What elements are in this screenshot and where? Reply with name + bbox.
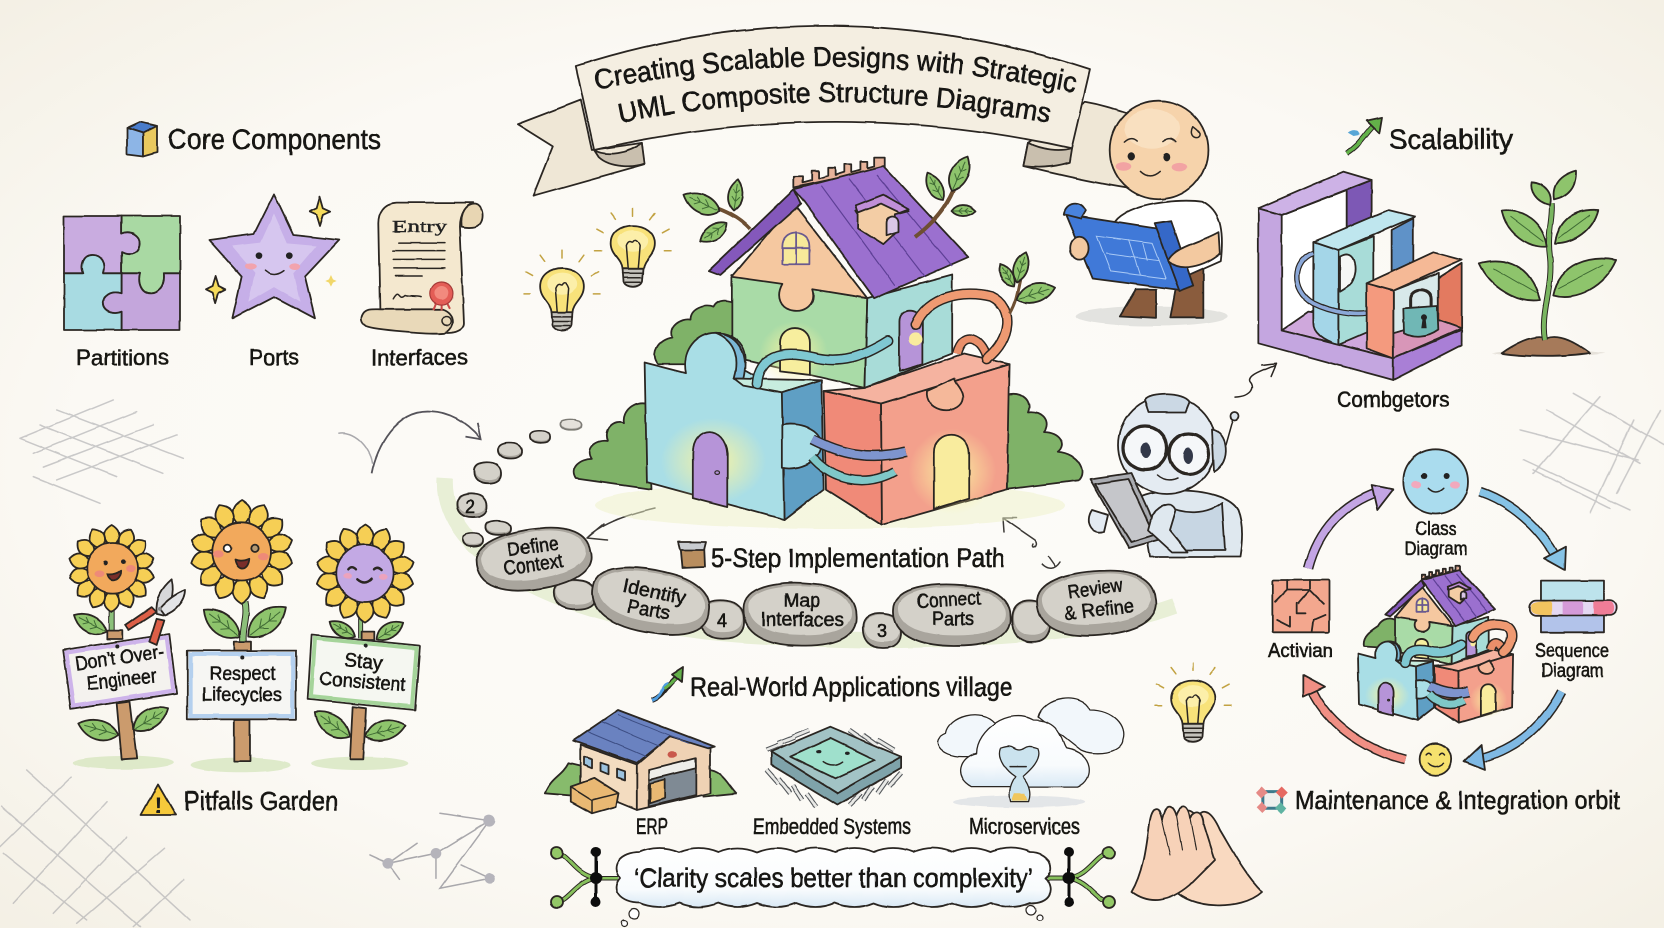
stone number 2: 2	[465, 497, 475, 517]
node: sequence diagram icon	[1529, 581, 1617, 632]
stepping stone path panel	[445, 420, 1175, 648]
stone: define context: Context	[502, 550, 565, 580]
heading: implementation path: 5-Step Implementation Path	[711, 543, 1005, 573]
grass band	[445, 478, 1175, 640]
quote text: ‘Clarity scales better than complexity’	[634, 863, 1033, 893]
icon: collaborating hands	[1132, 806, 1262, 905]
banner ribbon	[517, 26, 1166, 196]
sign text: respect lifecycles: Lifecycles	[202, 684, 282, 706]
ground shadow	[595, 481, 1065, 529]
stone: define context: Define	[506, 533, 560, 562]
icon: village arrow	[652, 667, 683, 700]
label: partitions: Partitions	[76, 345, 169, 370]
sign text: respect lifecycles: Respect	[209, 663, 276, 685]
title text path one	[596, 66, 1072, 92]
icon: orbit heading	[1256, 787, 1288, 814]
arrow: robot to connectors	[1235, 363, 1276, 398]
central composite house	[574, 153, 1082, 529]
icon: ERP warehouse	[545, 710, 736, 813]
heading: maintenance and integration orbit: Maintenance & Integration orbit	[1295, 785, 1621, 815]
small trail stones	[457, 420, 1050, 648]
mini composite house	[1358, 566, 1513, 723]
icon: light bulb upper	[595, 208, 671, 287]
node: smiley	[1420, 743, 1452, 775]
label: embedded systems: Embedded Systems	[753, 814, 911, 839]
icon: path bucket	[678, 542, 706, 568]
heading: real-world applications village: Real-World Applications village	[690, 672, 1013, 702]
icon: ports star	[206, 194, 339, 318]
icon: light bulb lower	[524, 251, 600, 331]
stone: identify parts	[587, 561, 715, 642]
arrow: house to first step	[587, 508, 655, 540]
thought bubbles	[621, 905, 1043, 926]
icon: growth arrow	[1347, 117, 1382, 153]
label: microservices: Microservices	[969, 814, 1080, 839]
stone number 3: 3	[877, 621, 887, 641]
panel: scalability	[1258, 117, 1617, 412]
icon: warning triangle	[141, 784, 176, 818]
heading icon: cube	[127, 122, 157, 156]
stone: map interfaces: Map	[784, 590, 820, 612]
stone: map interfaces	[744, 583, 856, 646]
flower: stay consistent	[308, 524, 420, 759]
icon: pruning shears	[125, 579, 185, 645]
flower: respect lifecycles	[187, 500, 296, 762]
label: class diagram	[1404, 518, 1468, 560]
house building blocks	[645, 157, 1010, 525]
label: ports: Ports	[249, 345, 299, 370]
panel: maintenance and integration orbit	[1256, 449, 1621, 815]
panel: pitfalls garden	[63, 500, 420, 818]
quote callout	[551, 847, 1115, 926]
illustration: nested connector frames	[1258, 172, 1462, 380]
connector: left	[551, 847, 618, 908]
title banner	[517, 24, 1128, 197]
sign text: stay consistent: Consistent	[319, 668, 407, 696]
icon: interfaces scroll	[361, 203, 483, 334]
arrow: curved pointer to path	[338, 412, 481, 473]
node: activity block icon	[1272, 580, 1329, 632]
character: robot with tablet	[1089, 394, 1242, 557]
stone: review and refine: & Refine	[1063, 595, 1135, 625]
label: connectors: Combgetors	[1337, 387, 1449, 412]
stone: define context	[472, 520, 595, 599]
stone: identify parts: Identify	[621, 575, 688, 610]
icon: partitions puzzle	[64, 216, 180, 330]
speech cloud	[616, 848, 1051, 907]
sign text: don't over-engineer	[73, 641, 166, 695]
sprig: lower right	[995, 250, 1058, 314]
sprig: left of roof	[679, 178, 750, 248]
label: ERP: ERP	[636, 814, 668, 839]
bushes behind house	[574, 301, 1082, 489]
stone: connect parts: Connect	[916, 587, 982, 613]
sign text: respect lifecycles	[202, 663, 282, 706]
decorative sketch grid: lower left	[0, 770, 190, 927]
label: class diagram: Diagram	[1404, 538, 1468, 560]
icon: warning triangle: !	[154, 792, 162, 818]
ground grass patches	[73, 756, 408, 772]
stone: connect parts: Parts	[932, 608, 974, 630]
sign text: stay consistent	[319, 650, 407, 696]
heading: scalability: Scalability	[1389, 124, 1513, 156]
label: sequence diagram	[1535, 640, 1609, 682]
arrow: double head and squiggle	[1003, 518, 1060, 568]
stone: map interfaces: Interfaces	[760, 609, 844, 631]
decorative sketch grid: upper left	[20, 400, 183, 503]
stone: review and refine	[1034, 565, 1159, 641]
panel: real-world applications village	[545, 667, 1124, 839]
icon: microservices cloud	[938, 698, 1124, 808]
icon: embedded chip	[767, 727, 901, 807]
stone: identify parts: Parts	[626, 596, 672, 625]
label: interfaces: Interfaces	[371, 345, 468, 370]
connector: right	[1048, 847, 1115, 908]
label: activity: Activian	[1268, 640, 1333, 662]
sign text: don't over-engineer: Engineer	[86, 665, 158, 695]
heading: pitfalls garden: Pitfalls Garden	[184, 786, 338, 816]
stone number 4: 4	[717, 611, 727, 631]
label: class diagram: Class	[1415, 518, 1457, 540]
illustration: growing plant	[1479, 171, 1617, 357]
decorative sketch grid: right	[1520, 393, 1664, 513]
orbit arrows	[1303, 485, 1566, 770]
stone: connect parts	[893, 584, 1010, 646]
stone: review and refine: Review	[1066, 574, 1125, 604]
title: second line: UML Composite Structure Diagrams	[618, 82, 1050, 122]
node: class diagram face	[1403, 449, 1468, 514]
scroll heading text: Entry	[392, 217, 448, 236]
heading: core components: Core Components	[168, 124, 381, 156]
flower: don't over-engineer	[63, 525, 177, 759]
label: sequence diagram: Diagram	[1541, 660, 1604, 682]
sign text: stay consistent: Stay	[344, 650, 383, 674]
mini house bush	[1364, 619, 1398, 648]
sprig: on roof	[915, 153, 976, 237]
decorative node graph	[370, 813, 495, 888]
character: architect with blueprint	[1064, 101, 1228, 326]
title: first line: Creating Scalable Designs with Strategic	[594, 46, 1076, 94]
title line 2 path	[620, 102, 1048, 123]
sign text: don't over-engineer: Don't Over-	[73, 641, 166, 675]
icon: light bulb right	[1155, 664, 1231, 742]
label: sequence diagram: Sequence	[1535, 640, 1609, 662]
panel: core components	[64, 122, 483, 370]
